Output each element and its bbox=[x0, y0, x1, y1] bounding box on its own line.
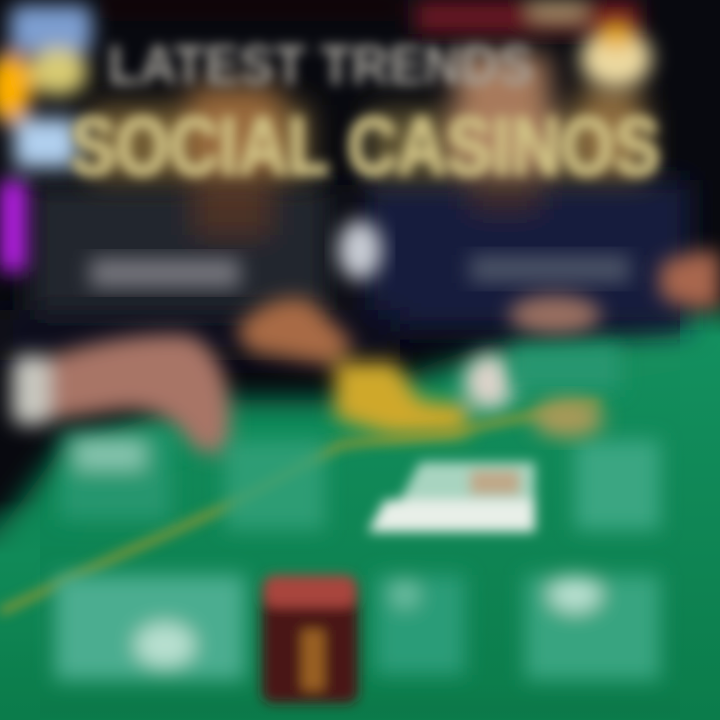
betting panels on table bbox=[55, 345, 660, 680]
neon purple strip bbox=[0, 180, 26, 272]
title line one: LATEST TRENDS bbox=[108, 33, 533, 96]
left arm bbox=[20, 334, 230, 455]
panel lower right bbox=[525, 575, 660, 680]
playing cards bbox=[368, 462, 535, 532]
shirt badge bbox=[338, 220, 382, 280]
panel lower middle bbox=[375, 575, 465, 675]
white hand bbox=[464, 354, 516, 410]
panel lower left bbox=[55, 575, 245, 680]
right hand far bbox=[660, 251, 720, 309]
gold betting line bbox=[0, 402, 600, 612]
white cuff bbox=[12, 355, 50, 425]
decorative lights, left edge bbox=[0, 5, 652, 272]
white spot lower left bbox=[135, 623, 195, 667]
player heads and shoulders bbox=[90, 55, 650, 180]
player shirts bbox=[0, 165, 690, 360]
blue light bbox=[10, 5, 92, 53]
panel upper right bbox=[575, 440, 660, 530]
panel back right bbox=[510, 345, 620, 390]
shirt text right bbox=[470, 255, 630, 283]
yellow light bbox=[28, 48, 88, 96]
panel upper middle bbox=[225, 440, 325, 530]
yellow sleeve bbox=[335, 362, 470, 435]
middle arm bbox=[235, 298, 355, 365]
players seated behind the table bbox=[0, 55, 690, 360]
orange light bbox=[0, 52, 32, 124]
green table bbox=[0, 295, 720, 720]
chip stack bbox=[262, 575, 358, 703]
small chips on table bbox=[532, 398, 604, 438]
white spot lower right bbox=[549, 576, 601, 612]
player hands bbox=[12, 251, 720, 455]
shirt text left bbox=[90, 258, 240, 288]
title bbox=[70, 33, 660, 192]
pale blue light bbox=[14, 118, 78, 168]
right lamp bbox=[580, 28, 652, 88]
panel upper left bbox=[60, 430, 170, 520]
red top backdrop bbox=[100, 0, 640, 34]
right hand middle bbox=[509, 295, 601, 335]
